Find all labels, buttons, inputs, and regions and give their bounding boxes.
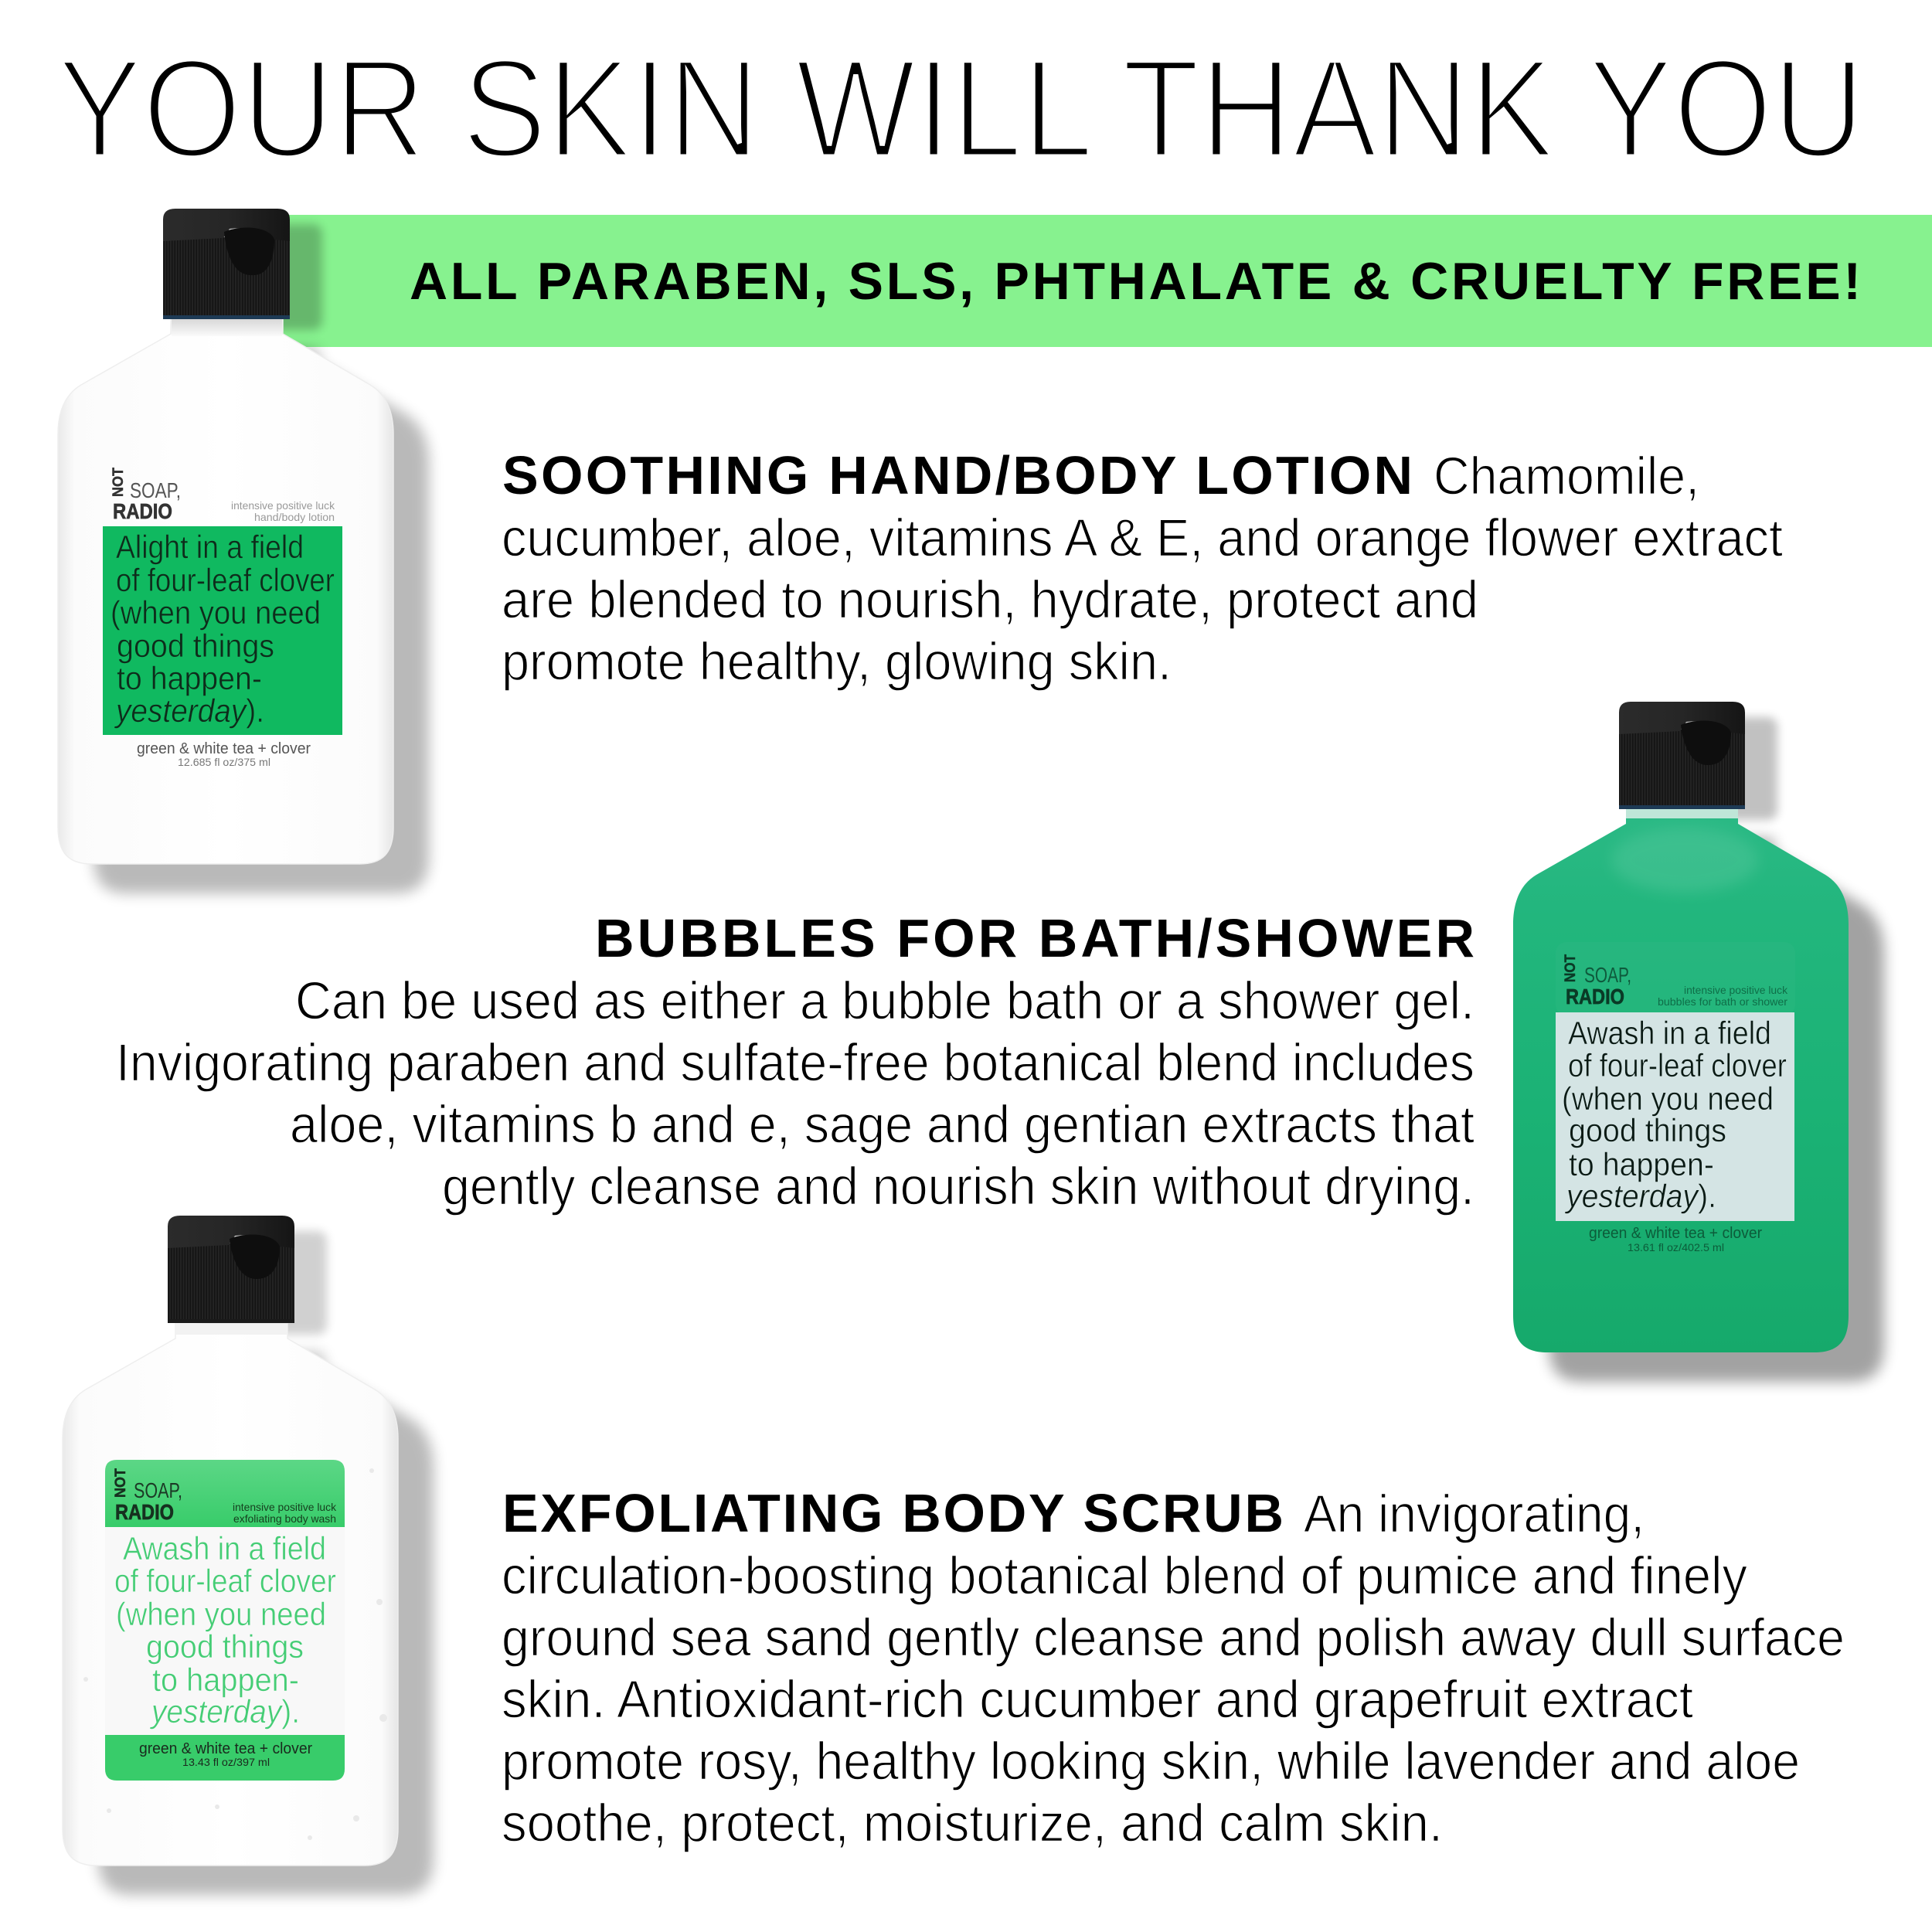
bottle: bubbles for bath or shower: green & white tea + clover bbox=[1589, 1225, 1762, 1242]
text block: exfoliating body scrub: skin. Antioxidant-rich cucumber and grapefruit extract bbox=[502, 1670, 1693, 1730]
bottle: exfoliating body scrub: exfoliating body wash bbox=[233, 1512, 336, 1525]
bottle: hand and body lotion: of four-leaf clover bbox=[116, 562, 335, 598]
text block: bubbles for bath/shower: BUBBLES FOR BATH/SHOWER bbox=[595, 908, 1475, 968]
bottle: bubbles for bath or shower: RADIO bbox=[1566, 985, 1624, 1009]
bottle: hand and body lotion: 12.685 fl oz/375 ml bbox=[178, 756, 270, 768]
bottle: hand and body lotion: intensive positive luck bbox=[231, 499, 335, 512]
bottle: hand and body lotion: (when you need bbox=[111, 594, 321, 631]
bottle: hand and body lotion: Alight in a field bbox=[116, 529, 304, 565]
bottle: exfoliating body scrub: (when you need bbox=[116, 1596, 326, 1632]
text block: exfoliating body scrub bbox=[502, 1483, 1845, 1853]
bottle: bubbles for bath or shower: of four-leaf clover bbox=[1568, 1047, 1787, 1083]
text block: soothing hand/body lotion: Chamomile, bbox=[1434, 447, 1699, 506]
bottle: exfoliating body scrub: Awash in a field bbox=[123, 1530, 326, 1566]
bottle: bubbles for bath or shower: good things bbox=[1569, 1112, 1726, 1148]
bottle: bubbles for bath or shower: (when you need bbox=[1562, 1080, 1774, 1117]
bottle: hand and body lotion: to happen- bbox=[117, 660, 262, 696]
bottle: exfoliating body scrub: good things bbox=[146, 1628, 304, 1665]
bottle: hand and body lotion: NOT bbox=[111, 468, 127, 497]
bottle: hand and body lotion: yesterday). bbox=[114, 692, 264, 729]
text block: bubbles for bath/shower: gently cleanse and nourish skin without drying. bbox=[442, 1157, 1475, 1216]
text block: bubbles for bath/shower: Can be used as either a bubble bath or a shower gel. bbox=[295, 971, 1475, 1031]
bottle: exfoliating body scrub: intensive positive luck bbox=[233, 1501, 337, 1513]
bottle: hand and body lotion: hand/body lotion bbox=[254, 511, 335, 523]
bottle: exfoliating body scrub: NOT bbox=[113, 1468, 129, 1498]
text block: exfoliating body scrub: circulation-boosting botanical blend of pumice and finely bbox=[502, 1546, 1747, 1606]
bottle: hand and body lotion: green & white tea + clover bbox=[137, 740, 311, 757]
banner: free-from claims: ALL PARABEN, SLS, PHTHALATE & CRUELTY FREE! bbox=[410, 252, 1861, 311]
bottle: bubbles for bath or shower: 13.61 fl oz/402.5 ml bbox=[1628, 1241, 1724, 1253]
bottle: bubbles for bath or shower: to happen- bbox=[1569, 1146, 1714, 1182]
text block: soothing hand/body lotion: cucumber, aloe, vitamins A & E, and orange flower extract bbox=[502, 509, 1783, 568]
bottle: bubbles for bath or shower: bubbles for bath or shower bbox=[1658, 995, 1787, 1008]
bottle: bubbles for bath or shower: NOT bbox=[1563, 954, 1579, 982]
text block: soothing hand/body lotion: are blended to nourish, hydrate, protect and bbox=[502, 570, 1478, 630]
bottle: exfoliating body scrub: of four-leaf clover bbox=[114, 1563, 336, 1599]
banner: free-from claims bbox=[263, 215, 1932, 347]
bottle: exfoliating body scrub: to happen- bbox=[152, 1662, 299, 1698]
text block: exfoliating body scrub: EXFOLIATING BODY SCRUB bbox=[502, 1483, 1284, 1543]
bottle: hand and body lotion: good things bbox=[117, 628, 274, 664]
bottle: hand and body lotion: SOAP, bbox=[130, 478, 181, 502]
bottle: exfoliating body scrub bbox=[63, 1216, 434, 1895]
bottle: bubbles for bath or shower bbox=[1513, 702, 1884, 1382]
text block: soothing hand/body lotion bbox=[502, 445, 1783, 692]
bottle: exfoliating body scrub: RADIO bbox=[115, 1500, 174, 1524]
text block: exfoliating body scrub: soothe, protect, moisturize, and calm skin. bbox=[502, 1794, 1443, 1853]
text block: exfoliating body scrub: ground sea sand gently cleanse and polish away dull surface bbox=[502, 1608, 1845, 1668]
bottle: exfoliating body scrub: green & white tea + clover bbox=[139, 1740, 312, 1757]
bottle: bubbles for bath or shower: Awash in a field bbox=[1568, 1015, 1771, 1051]
bottle: hand and body lotion bbox=[58, 209, 429, 893]
text block: bubbles for bath/shower: Invigorating paraben and sulfate-free botanical blend includes bbox=[116, 1033, 1475, 1093]
text block: exfoliating body scrub: An invigorating, bbox=[1304, 1485, 1645, 1544]
bottle: exfoliating body scrub: SOAP, bbox=[134, 1478, 182, 1502]
text block: soothing hand/body lotion: SOOTHING HAND/BODY LOTION bbox=[502, 445, 1413, 505]
bottle: hand and body lotion: RADIO bbox=[113, 499, 172, 523]
bottle: exfoliating body scrub: yesterday). bbox=[149, 1693, 300, 1730]
bottle: exfoliating body scrub: 13.43 fl oz/397 ml bbox=[182, 1756, 270, 1768]
bottle: bubbles for bath or shower: SOAP, bbox=[1584, 963, 1631, 987]
text block: bubbles for bath/shower: aloe, vitamins b and e, sage and gentian extracts that bbox=[290, 1095, 1475, 1155]
text block: exfoliating body scrub: promote rosy, healthy looking skin, while lavender and aloe bbox=[502, 1732, 1800, 1791]
text block: soothing hand/body lotion: promote healthy, glowing skin. bbox=[502, 632, 1172, 692]
bottle: bubbles for bath or shower: yesterday). bbox=[1564, 1178, 1716, 1214]
bottle: bubbles for bath or shower: intensive positive luck bbox=[1684, 984, 1788, 996]
text block: bubbles for bath/shower bbox=[116, 908, 1475, 1216]
